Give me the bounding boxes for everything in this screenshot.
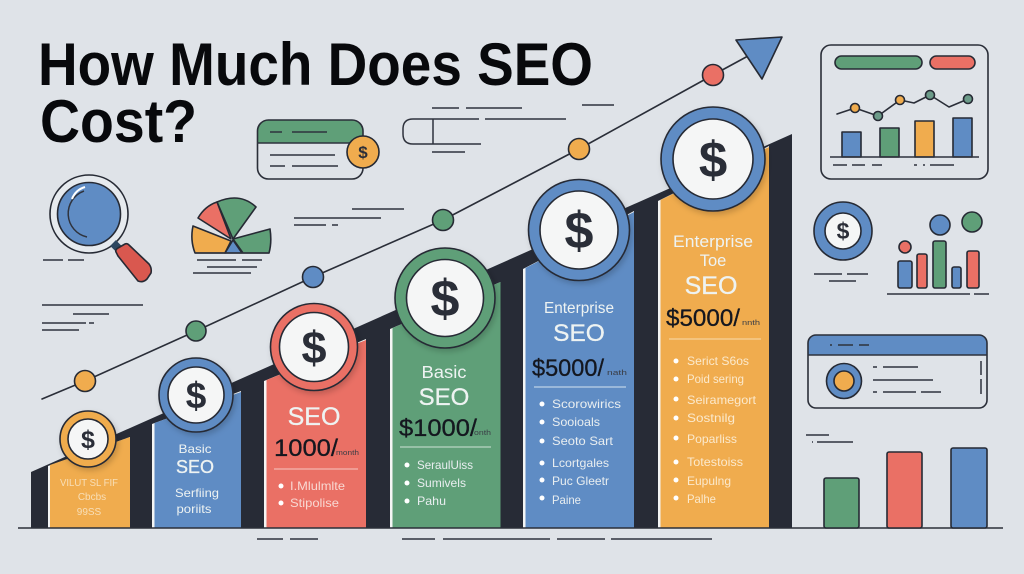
panel: tier 4: Basic [422,362,467,382]
icon: blue coin [814,202,872,281]
panel: tier 1: VILUT SL FIF [60,478,118,489]
coin: tier 1: $ [81,426,95,454]
decorative note lines [42,209,404,330]
panel: tier 4: Sumivels [417,476,466,490]
panel: tier 5 [523,211,634,528]
title [38,31,593,155]
icon: payment card with coin: $ [358,143,368,162]
panel: tier 6: Palhe [687,492,716,506]
panel: tier 1: Cbcbs [78,492,106,503]
panel: tier 2: poriits [176,502,212,516]
price: $1000/ [399,415,477,442]
coin: tier 6 [661,107,765,211]
panel: tier 6: Enterprise [673,233,753,251]
coin: tier 4 [395,248,495,348]
panel: tier 5: Puc Gleetr [552,474,609,488]
panel: tier 1 [48,437,130,528]
panel: tier 6: Eupulng [687,474,731,488]
panel: tier 6: nnth [742,320,760,327]
panel: tier 6: Seiramegort [687,393,757,407]
panel: dashboard [821,45,988,179]
baseline [18,527,1003,529]
panel: tier 6: Sostnilg [687,411,735,425]
panel: tier 4: SeraulUiss [417,458,473,472]
panel: tier 3 [264,339,366,528]
coin: tier 2: $ [186,375,207,416]
icon: magnifying glass [43,175,151,282]
title: Cost? [40,88,197,155]
coin: tier 5 [528,180,630,280]
panel: tier 6 [658,146,769,528]
panel: tier 5: Enterprise [544,300,614,317]
panel: tier 2: Basic [178,442,212,456]
panel: tier 4 [390,282,500,528]
panel: tier 4: onth [474,430,491,437]
icon: payment card with coin [257,120,379,179]
coin: tier 2 [159,358,233,432]
coin: tier 1 [60,411,116,467]
panel: tier 5: Sooioals [552,415,600,429]
panel: tier 4: SEO [419,384,469,411]
panel: tier 6: SEO [685,272,737,300]
panel: tier 2 [152,391,241,528]
title: How Much Does SEO [38,31,593,98]
panel: tier 5: Lcortgales [552,456,609,470]
price: 1000/ [274,435,338,462]
chart: bottom bars [806,435,987,528]
icon: clip outline [403,105,614,152]
panel: tier 3: Stipolise [290,496,339,510]
panel: tier 3: SEO [288,403,340,431]
icon: blue coin: $ [837,218,850,244]
panel: tier 6: Serict S6os [687,354,749,368]
panel: tier 6: Poparliss [687,432,737,446]
panel: tier 2: Serfiing [175,486,219,500]
coin: tier 4: $ [431,270,460,328]
panel: tier 4: Pahu [417,494,446,508]
stepped base [31,134,792,528]
panel: tier 5: SEO [553,320,605,347]
panel: tier 3: I.Mlulmlte [290,479,345,493]
coin: tier 3: $ [301,322,327,373]
icon: pie chart [192,198,271,273]
chart: small bars with dots [887,212,989,294]
panel: tier 6: Poid sering [687,372,744,386]
price: $5000/ [532,355,604,382]
trend line [42,37,782,399]
coin: tier 3 [270,304,358,390]
panel: tier 2: SEO [176,457,214,477]
coin: tier 6: $ [699,131,727,188]
panel: tier 5: Scorowirics [552,397,621,411]
panel: tier 6: Totestoiss [687,455,743,469]
panel: tier 5: nath [607,370,627,377]
panel: tier 3: month [336,450,359,457]
price: $5000/ [666,305,740,332]
coin: tier 5: $ [565,202,594,260]
panel: tier 5: Seoto Sart [552,434,614,448]
panel: tier 6: Toe [700,252,726,270]
panel: tier 1: 99SS [77,507,102,518]
panel: tier 5: Paine [552,493,581,507]
panel: browser window [808,335,987,408]
